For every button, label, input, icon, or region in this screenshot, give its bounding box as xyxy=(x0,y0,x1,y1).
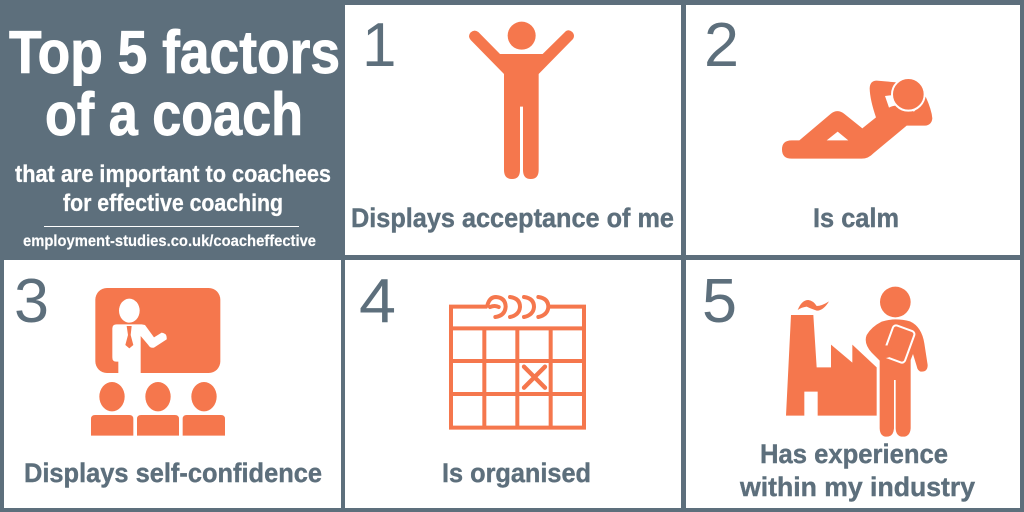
label: Is organised xyxy=(442,458,591,488)
panel: factor 2 xyxy=(686,5,1020,255)
label: Has experience xyxy=(760,439,948,469)
source url: employment-studies.co.uk/coacheffective xyxy=(23,233,316,250)
label: within my industry xyxy=(739,472,975,502)
panel: factor 5 xyxy=(686,260,1020,508)
subtitle xyxy=(15,161,331,217)
icon: presenter and audience xyxy=(91,288,225,436)
number 1: 1 xyxy=(362,11,396,80)
label: Displays acceptance of me xyxy=(351,203,674,233)
icon: factory and person with tablet xyxy=(786,287,928,437)
number 4: 4 xyxy=(359,267,396,336)
panel: factor 1 xyxy=(345,5,681,255)
subtitle: for effective coaching xyxy=(63,190,283,217)
icon: person with raised arms xyxy=(469,22,574,179)
title xyxy=(9,19,340,148)
label xyxy=(739,439,975,502)
number 5: 5 xyxy=(702,267,737,336)
panel: factor 4 xyxy=(345,260,681,508)
label: Is calm xyxy=(813,203,899,233)
title panel xyxy=(9,19,340,250)
number 2: 2 xyxy=(704,11,739,80)
title: Top 5 factors xyxy=(9,19,340,86)
icon: reclining person xyxy=(782,78,932,159)
number 3: 3 xyxy=(14,267,49,336)
title: of a coach xyxy=(45,81,303,148)
icon: calendar xyxy=(451,297,584,428)
panel: factor 3 xyxy=(4,260,341,508)
subtitle: that are important to coachees xyxy=(15,161,331,188)
label: Displays self-confidence xyxy=(24,458,322,488)
